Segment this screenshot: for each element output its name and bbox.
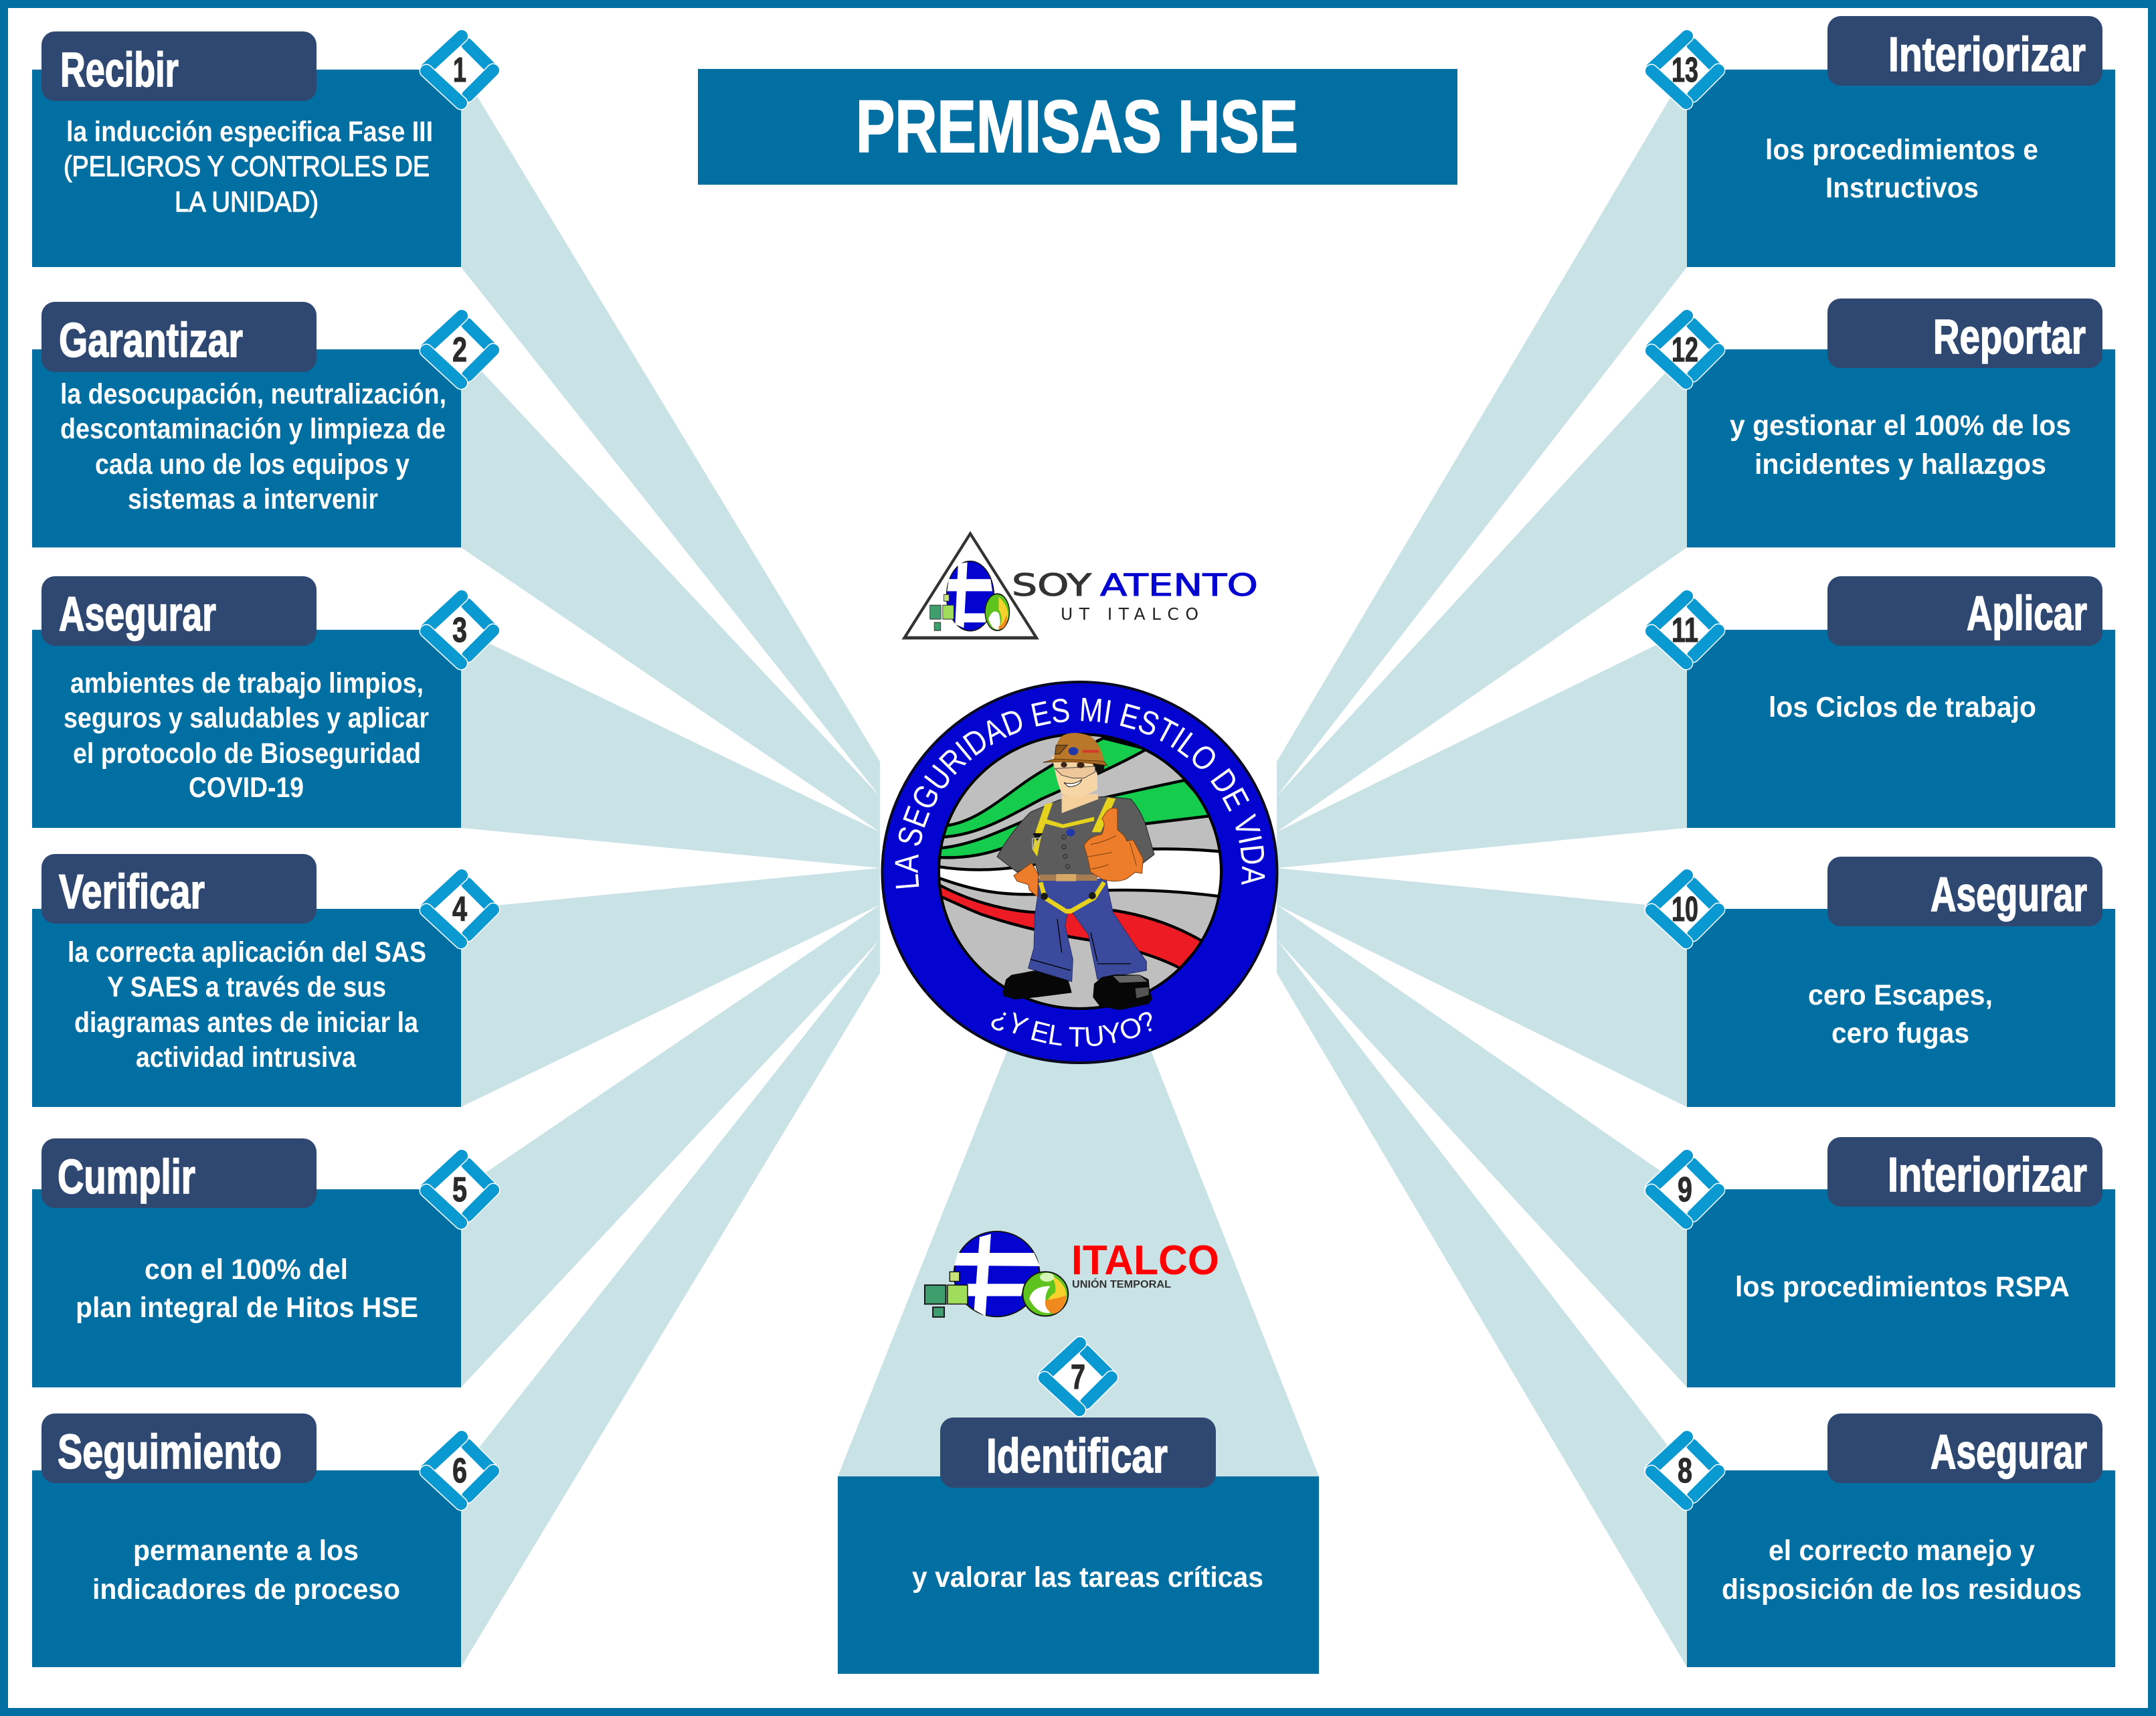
heading: Cumplir xyxy=(58,1150,195,1204)
heading: Interiorizar xyxy=(1888,1148,2087,1202)
body text: la inducción especifica Fase III xyxy=(66,116,433,148)
panel 4: Verificar xyxy=(32,854,500,1107)
central seal: La seguridad es mi estilo de vida xyxy=(881,681,1278,1064)
light rays: right side xyxy=(1277,70,1687,1667)
number badge 6: 6 xyxy=(452,1452,467,1490)
heading tab xyxy=(1827,1137,2102,1207)
body text: cada uno de los equipos y xyxy=(95,448,410,481)
body text: LA UNIDAD) xyxy=(175,186,319,218)
logo: Italco Unión Temporal: UNIÓN TEMPORAL xyxy=(1072,1278,1171,1290)
body text: Y SAES a través de sus xyxy=(107,971,386,1003)
number badge 13: 13 xyxy=(1672,51,1698,90)
panel 10: Asegurar xyxy=(1645,857,2115,1107)
number badge 8 xyxy=(1645,1430,1725,1511)
body text xyxy=(68,936,426,1074)
light rays: left side xyxy=(461,70,880,1667)
body text xyxy=(1730,410,2071,481)
body text: el correcto manejo y xyxy=(1769,1535,2035,1567)
body text: la correcta aplicación del SAS xyxy=(68,936,426,968)
panel 13: Interiorizar xyxy=(1645,16,2115,267)
number badge 11: 11 xyxy=(1672,611,1698,650)
panel 7: Identificar xyxy=(838,1337,1319,1674)
body text xyxy=(64,667,429,804)
number badge 7 xyxy=(1038,1337,1118,1417)
heading: Asegurar xyxy=(1930,1426,2087,1479)
heading tab xyxy=(1827,576,2102,646)
heading tab xyxy=(1827,857,2102,926)
logo: Italco Unión Temporal xyxy=(925,1231,1219,1317)
body text: con el 100% del xyxy=(145,1254,348,1286)
panel 3: Asegurar xyxy=(32,576,500,828)
body text: sistemas a intervenir xyxy=(128,483,378,515)
heading tab xyxy=(41,31,317,101)
panel 2: Garantizar xyxy=(32,302,500,547)
number badge 6 xyxy=(420,1430,500,1511)
body text: cero Escapes, xyxy=(1808,979,1993,1011)
heading: Seguimiento xyxy=(58,1426,282,1479)
body text xyxy=(1808,979,1993,1049)
number badge 5: 5 xyxy=(452,1171,467,1209)
seal inner striped background xyxy=(940,736,1220,1007)
logo: Italco Unión Temporal: ITALCO xyxy=(1071,1237,1219,1284)
panel 9: Interiorizar xyxy=(1645,1137,2115,1387)
number badge 5 xyxy=(420,1149,500,1229)
number badge 12 xyxy=(1645,309,1725,390)
number badge 13 xyxy=(1645,29,1725,110)
title banner: PREMISAS HSE xyxy=(856,86,1298,168)
seal blue ring xyxy=(882,682,1277,1063)
heading tab xyxy=(1827,1413,2102,1483)
body text xyxy=(1722,1535,2082,1606)
body text: los procedimientos RSPA xyxy=(1735,1271,2070,1303)
body text: los Ciclos de trabajo xyxy=(1769,691,2036,723)
seal bottom text: ¿Y EL TUYO? xyxy=(992,1012,1152,1047)
heading: Reportar xyxy=(1933,311,2086,364)
body text: seguros y saludables y aplicar xyxy=(64,702,429,734)
number badge 3: 3 xyxy=(452,611,467,650)
number badge 9 xyxy=(1645,1149,1725,1229)
body text: permanente a los xyxy=(133,1535,359,1567)
number badge 9: 9 xyxy=(1678,1171,1692,1209)
number badge 11 xyxy=(1645,590,1725,670)
body text: COVID-19 xyxy=(189,772,304,804)
heading tab xyxy=(1827,298,2102,368)
panel 11: Aplicar xyxy=(1645,576,2115,828)
body text: Instructivos xyxy=(1825,172,1979,204)
heading tab xyxy=(940,1418,1216,1488)
body text xyxy=(64,116,433,218)
panel 6: Seguimiento xyxy=(32,1413,500,1667)
heading: Asegurar xyxy=(59,588,216,641)
body text: y gestionar el 100% de los xyxy=(1730,410,2071,442)
body text: indicadores de proceso xyxy=(92,1573,400,1606)
body text xyxy=(92,1535,400,1606)
heading: Recibir xyxy=(60,44,179,97)
number badge 4 xyxy=(420,869,500,949)
heading tab xyxy=(41,854,317,924)
number badge 1 xyxy=(420,29,500,110)
heading tab xyxy=(41,1138,317,1208)
number badge 3 xyxy=(420,590,500,670)
number badge 12: 12 xyxy=(1672,331,1698,369)
body text: incidentes y hallazgos xyxy=(1755,448,2046,481)
body text: el protocolo de Bioseguridad xyxy=(73,738,421,770)
body text xyxy=(1765,134,2038,204)
heading tab xyxy=(41,1413,317,1483)
body text: ambientes de trabajo limpios, xyxy=(70,667,424,699)
body text xyxy=(60,378,446,515)
panel 8: Asegurar xyxy=(1645,1413,2115,1667)
heading tab xyxy=(1827,16,2102,86)
heading: Verificar xyxy=(59,865,205,919)
body text xyxy=(76,1254,418,1324)
number badge 4: 4 xyxy=(452,890,467,929)
body text: descontaminación y limpieza de xyxy=(60,413,446,445)
heading: Interiorizar xyxy=(1888,28,2086,82)
heading: Garantizar xyxy=(59,314,243,367)
seal top text: LA SEGURIDAD ES MI ESTILO DE VIDA xyxy=(895,697,1265,889)
number badge 7: 7 xyxy=(1071,1358,1085,1397)
body text: los procedimientos e xyxy=(1765,134,2038,166)
body text: disposición de los residuos xyxy=(1722,1573,2082,1606)
safety worker figure xyxy=(997,733,1154,1010)
heading: Identificar xyxy=(986,1430,1168,1483)
heading: Asegurar xyxy=(1930,868,2087,922)
logo: Soy Atento UT Italco xyxy=(905,533,1258,638)
body text: actividad intrusiva xyxy=(136,1041,357,1074)
number badge 2 xyxy=(420,309,500,390)
body text: (PELIGROS Y CONTROLES DE xyxy=(64,151,430,183)
number badge 10: 10 xyxy=(1672,890,1698,929)
heading tab xyxy=(41,302,317,372)
heading tab xyxy=(41,576,317,646)
body text: la desocupación, neutralización, xyxy=(60,378,446,410)
number badge 2: 2 xyxy=(452,331,467,369)
number badge 10 xyxy=(1645,869,1725,949)
panel 5: Cumplir xyxy=(32,1138,500,1387)
body text: y valorar las tareas críticas xyxy=(912,1561,1263,1594)
light ray: bottom centre xyxy=(838,1051,1319,1476)
logo: Soy Atento UT Italco: ATENTO xyxy=(1100,568,1258,603)
number badge 1: 1 xyxy=(453,51,466,90)
body text: cero fugas xyxy=(1831,1017,1969,1049)
body text: diagramas antes de iniciar la xyxy=(74,1007,419,1039)
title banner xyxy=(698,69,1457,185)
logo: Soy Atento UT Italco: SOY xyxy=(1012,568,1092,603)
number badge 8: 8 xyxy=(1678,1452,1692,1490)
heading: Aplicar xyxy=(1967,587,2087,640)
panel 1: Recibir xyxy=(32,29,500,267)
body text: plan integral de Hitos HSE xyxy=(76,1292,418,1324)
panel 12: Reportar xyxy=(1645,298,2115,547)
logo: Soy Atento UT Italco: UT ITALCO xyxy=(1061,604,1198,624)
